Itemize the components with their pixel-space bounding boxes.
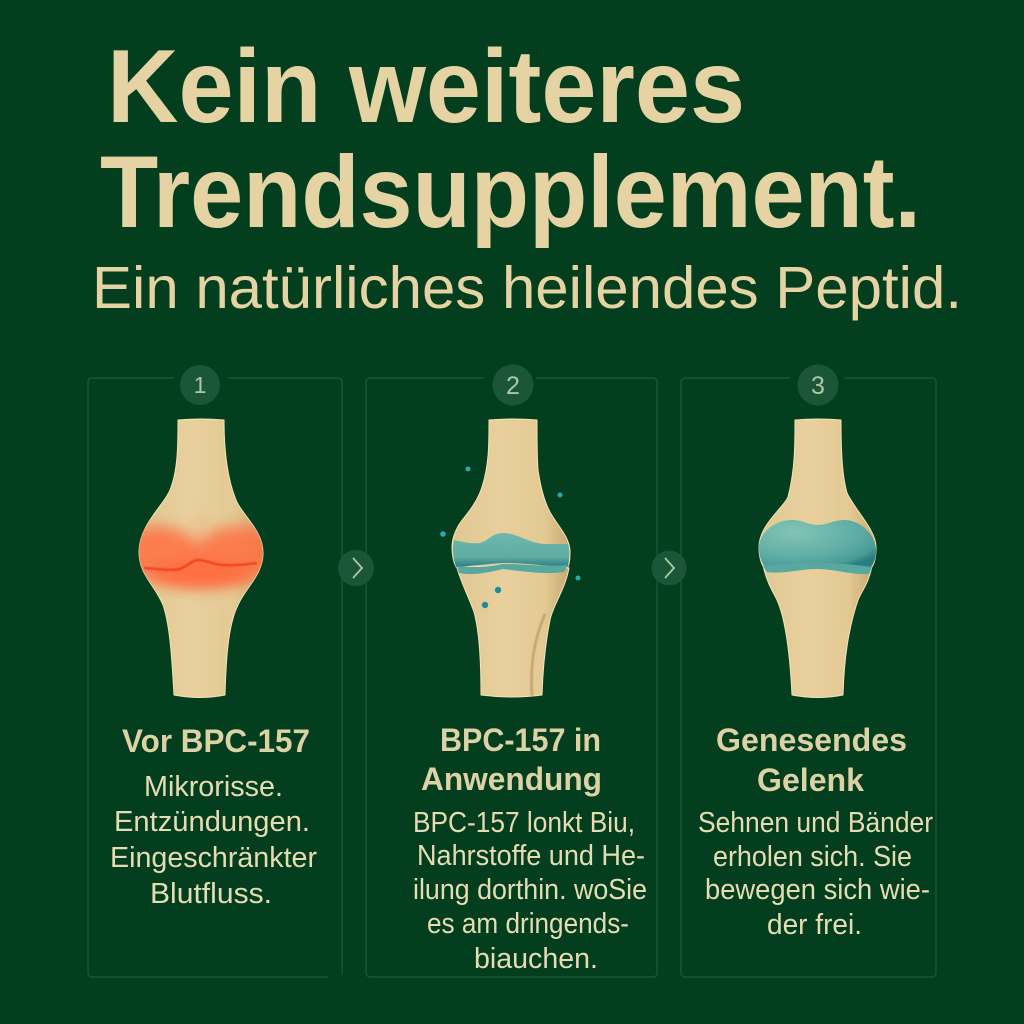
- upper bone: [452, 419, 570, 567]
- badge 2: 2: [506, 372, 520, 400]
- cartilage band: [453, 533, 569, 567]
- badge 3: [790, 357, 846, 413]
- body text 2: biauchen.: [474, 943, 598, 975]
- subtitle: Ein natürliches heilendes Peptid.: [92, 255, 962, 321]
- arrow 2: [652, 550, 686, 586]
- badge 2: [483, 358, 537, 412]
- badge 1: 1: [194, 372, 206, 398]
- lower bone: [763, 566, 872, 698]
- icon: healed joint: [759, 419, 876, 698]
- upper bone: [759, 419, 876, 568]
- body text 1: [110, 771, 317, 910]
- title: Trendsupplement.: [100, 135, 921, 249]
- body text 1: Entzündungen.: [114, 806, 310, 838]
- heading 2: [421, 722, 602, 797]
- heading 3: [716, 722, 907, 798]
- title: [100, 29, 921, 249]
- body text 3: bewegen sich wie-: [705, 874, 930, 906]
- body text 3: Sehnen und Bänder: [698, 807, 933, 839]
- nutrient particles: [440, 466, 580, 608]
- heading 1: Vor BPC-157: [122, 723, 310, 759]
- arrow 1: [338, 550, 374, 586]
- panel 3: recovering joint: [681, 357, 936, 977]
- lower cartilage strip: [457, 564, 568, 574]
- icon: inflamed joint: [138, 418, 264, 698]
- heading 2: Anwendung: [421, 761, 602, 797]
- panel 2 frame: [366, 378, 657, 977]
- body text 3: [698, 807, 933, 941]
- lower cartilage strip: [763, 563, 872, 574]
- body text 2: es am dringends-: [427, 908, 629, 940]
- healed cartilage: [759, 520, 876, 568]
- panel 1: before BPC-157: [88, 357, 342, 977]
- panel 1 frame: [88, 378, 342, 977]
- body text 1: Blutfluss.: [150, 878, 272, 910]
- body text 1: Mikrorisse.: [144, 771, 283, 803]
- body text 3: der frei.: [767, 909, 862, 941]
- heading 2: BPC-157 in: [440, 722, 601, 758]
- panel 2: BPC-157 in use: [366, 358, 657, 977]
- body text 3: erholen sich. Sie: [713, 841, 912, 873]
- body text 2: ilung dorthin. woSie: [413, 874, 647, 906]
- badge 1: [173, 357, 229, 413]
- icon: joint with teal cartilage: [440, 419, 580, 697]
- lower bone: [457, 568, 569, 697]
- body text 2: BPC-157 lonkt Biu,: [413, 807, 635, 839]
- heading 3: Genesendes: [716, 722, 907, 758]
- badge 3: 3: [811, 372, 825, 400]
- body text 2: Nahrstoffe und He-: [417, 840, 645, 872]
- panel 3 frame: [681, 378, 936, 977]
- title: Kein weiteres: [107, 29, 745, 145]
- body text 1: Eingeschränkter: [110, 842, 317, 874]
- body text 2: [413, 807, 647, 975]
- fibula line: [532, 614, 545, 696]
- heading 3: Gelenk: [757, 762, 864, 798]
